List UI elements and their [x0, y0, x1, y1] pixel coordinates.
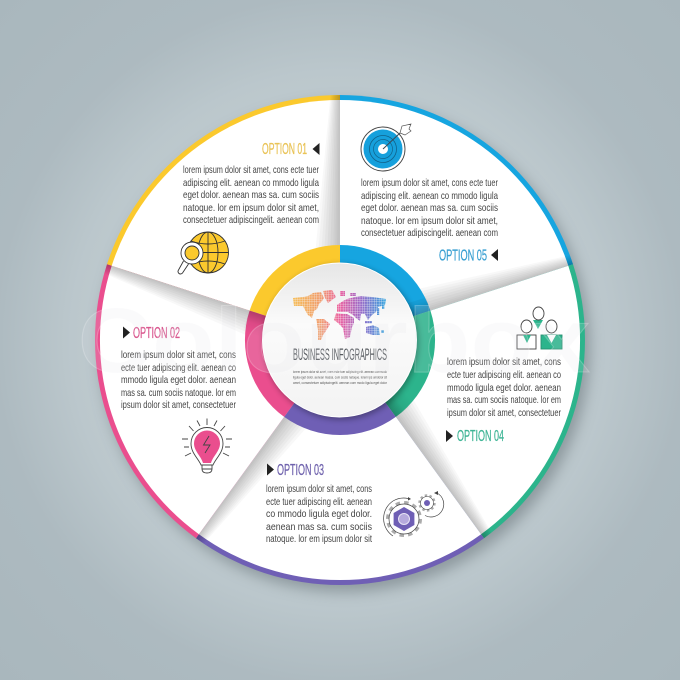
hub ring segments — [243, 245, 435, 435]
icon: gears — [384, 491, 444, 536]
arrow: option 05 — [491, 249, 498, 261]
text: option 03: natoque. lor em ipsum dolor sit — [266, 534, 372, 545]
text: option 02: ipsum dolor sit amet, consectetuer — [121, 400, 236, 411]
hub description: ligula eget dolor. aenean massa. cum sociis natoque. lorem ips umdolor sit — [293, 374, 388, 380]
text: option 01: natoque. lor em ipsum dolor sit amet, — [183, 203, 319, 214]
text: option 02: lorem ipsum dolor sit amet, cons — [121, 350, 236, 361]
heading: option 03: OPTION 03 — [277, 462, 324, 479]
text: option 04: lorem ipsum dolor sit amet, cons — [447, 357, 561, 368]
panel: option 04 — [396, 264, 585, 538]
text: option 02: mas sa. cum sociis natoque. lor em — [121, 388, 236, 399]
icon: team of people — [517, 307, 562, 349]
text: option 01: consectetuer adipiscingelit. aenean com — [183, 215, 319, 226]
text: option 01 — [183, 165, 319, 226]
arrow: option 03 — [267, 464, 274, 476]
icon: globe with magnifier — [178, 232, 228, 274]
hub description — [293, 369, 388, 385]
text: option 03: lorem ipsum dolor sit amet, cons — [266, 484, 372, 495]
text: option 01: adipiscing elit. aenean co mmodo ligula — [183, 178, 319, 189]
panel: option 01 — [107, 95, 340, 316]
text: option 02: ecte tuer adipiscing elit. aenean co — [121, 363, 236, 374]
heading: option 02: OPTION 02 — [133, 325, 180, 342]
text: option 01: eget dolor. aenean mas sa. cum sociis — [183, 190, 319, 201]
text: option 04: mas sa. cum sociis natoque. lor em — [447, 395, 561, 406]
text: option 05: natoque. lor em ipsum dolor sit amet, — [361, 216, 498, 227]
heading: option 05: OPTION 05 — [439, 248, 487, 264]
text: option 03: co mmodo ligula eget dolor. — [266, 509, 372, 520]
text: option 04: ecte tuer adipiscing elit. aenean co — [447, 370, 561, 381]
center hub: BUSINESS INFOGRAPHICS — [293, 345, 387, 364]
heading: option 04: OPTION 04 — [457, 428, 504, 445]
text: option 05: consectetuer adipiscingelit. aenean com — [361, 228, 498, 239]
arrow: option 02 — [123, 326, 130, 338]
text: option 05 — [361, 178, 498, 239]
watermark: Colourbox — [78, 290, 590, 392]
center hub — [243, 245, 435, 435]
text: option 02 — [121, 350, 236, 411]
dotted world map — [293, 290, 386, 340]
heading: option 01: OPTION 01 — [262, 141, 307, 158]
text: option 03: aenean mas sa. cum sociis — [266, 522, 372, 533]
text: option 03: ecte tuer adipiscing elit. aenean — [266, 497, 372, 508]
text: option 05: adipiscing elit. aenean co mmodo ligula — [361, 191, 498, 202]
text: option 02: mmodo ligula eget dolor. aenean — [121, 375, 236, 386]
icon: target with arrow — [361, 124, 411, 171]
hub description: amet, consectetuer adipiscingelit. aenean com modo ligula eget dolor — [293, 380, 388, 385]
text: option 04: ipsum dolor sit amet, consectetuer — [447, 408, 561, 419]
text: option 03 — [266, 484, 372, 545]
text: option 05: eget dolor. aenean mas sa. cum sociis — [361, 203, 498, 214]
icon: light bulb — [182, 418, 232, 473]
text: option 04: mmodo ligula eget dolor. aenean — [447, 383, 561, 394]
text: option 05: lorem ipsum dolor sit amet, cons ecte tuer — [361, 178, 498, 189]
arrow: option 01 — [312, 143, 320, 155]
text: option 01: lorem ipsum dolor sit amet, cons ecte tuer — [183, 165, 319, 176]
panel: option 02 — [95, 264, 294, 538]
disc drop shadow — [100, 102, 590, 592]
hub description: lorem ipsum dolor sit amet, cons ecte tuer adipiscing elit. aenean commodo — [293, 369, 387, 374]
panel: option 05 — [340, 95, 573, 310]
arrow: option 04 — [446, 430, 453, 442]
text: option 04 — [447, 357, 561, 419]
panel: option 03 — [196, 403, 484, 585]
